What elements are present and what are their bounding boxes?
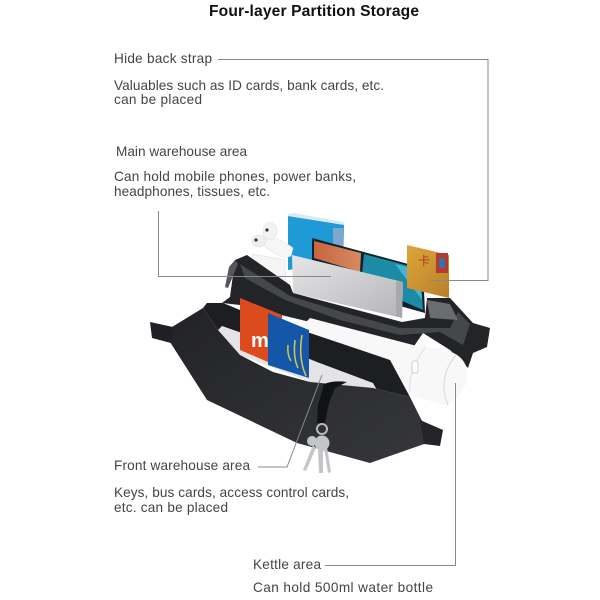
callout: kettle area [253,383,456,595]
icon: earphones [252,222,293,286]
front bag back wall [203,303,410,397]
front bag interior [218,326,378,392]
key strap [317,381,347,434]
back pocket items [252,213,449,318]
icon: blue card [268,313,309,378]
icon: smartphone [312,238,425,313]
callout: hide back strap: can be placed [114,92,202,107]
callout: front warehouse area: etc. can be placed [114,500,228,515]
callout: main warehouse area: Can hold mobile phones, power banks, [114,169,356,184]
icon: power bank [292,255,403,318]
icon: red card [240,298,282,368]
icon: bank card [407,245,449,298]
callout: hide back strap: Hide back strap [114,51,212,66]
front bag body [170,308,427,463]
callout: kettle area: Kettle area [253,557,321,572]
back bag [222,255,490,368]
front bag [150,298,443,473]
icon: blue box [288,213,344,270]
icon: bank card: 卡 [418,254,430,268]
callout: front warehouse area: Keys, bus cards, access control cards, [114,485,349,500]
callout: hide back strap [114,51,488,280]
title: Four-layer Partition Storage [209,3,419,20]
bag illustration [150,213,490,473]
callout: main warehouse area: Main warehouse area [116,144,247,159]
callout: hide back strap: Valuables such as ID cards, bank cards, etc. [114,78,384,93]
callout: main warehouse area: headphones, tissues, etc. [114,184,270,199]
water bottle [303,318,467,405]
zipper tabs [150,322,173,343]
callout: front warehouse area [114,375,349,515]
callout: kettle area: Can hold 500ml water bottle [253,580,433,595]
icon: red card: mi [251,330,274,352]
callout: main warehouse area [114,144,356,276]
callout: front warehouse area: Front warehouse area [114,458,250,473]
icon: keys [303,436,331,473]
